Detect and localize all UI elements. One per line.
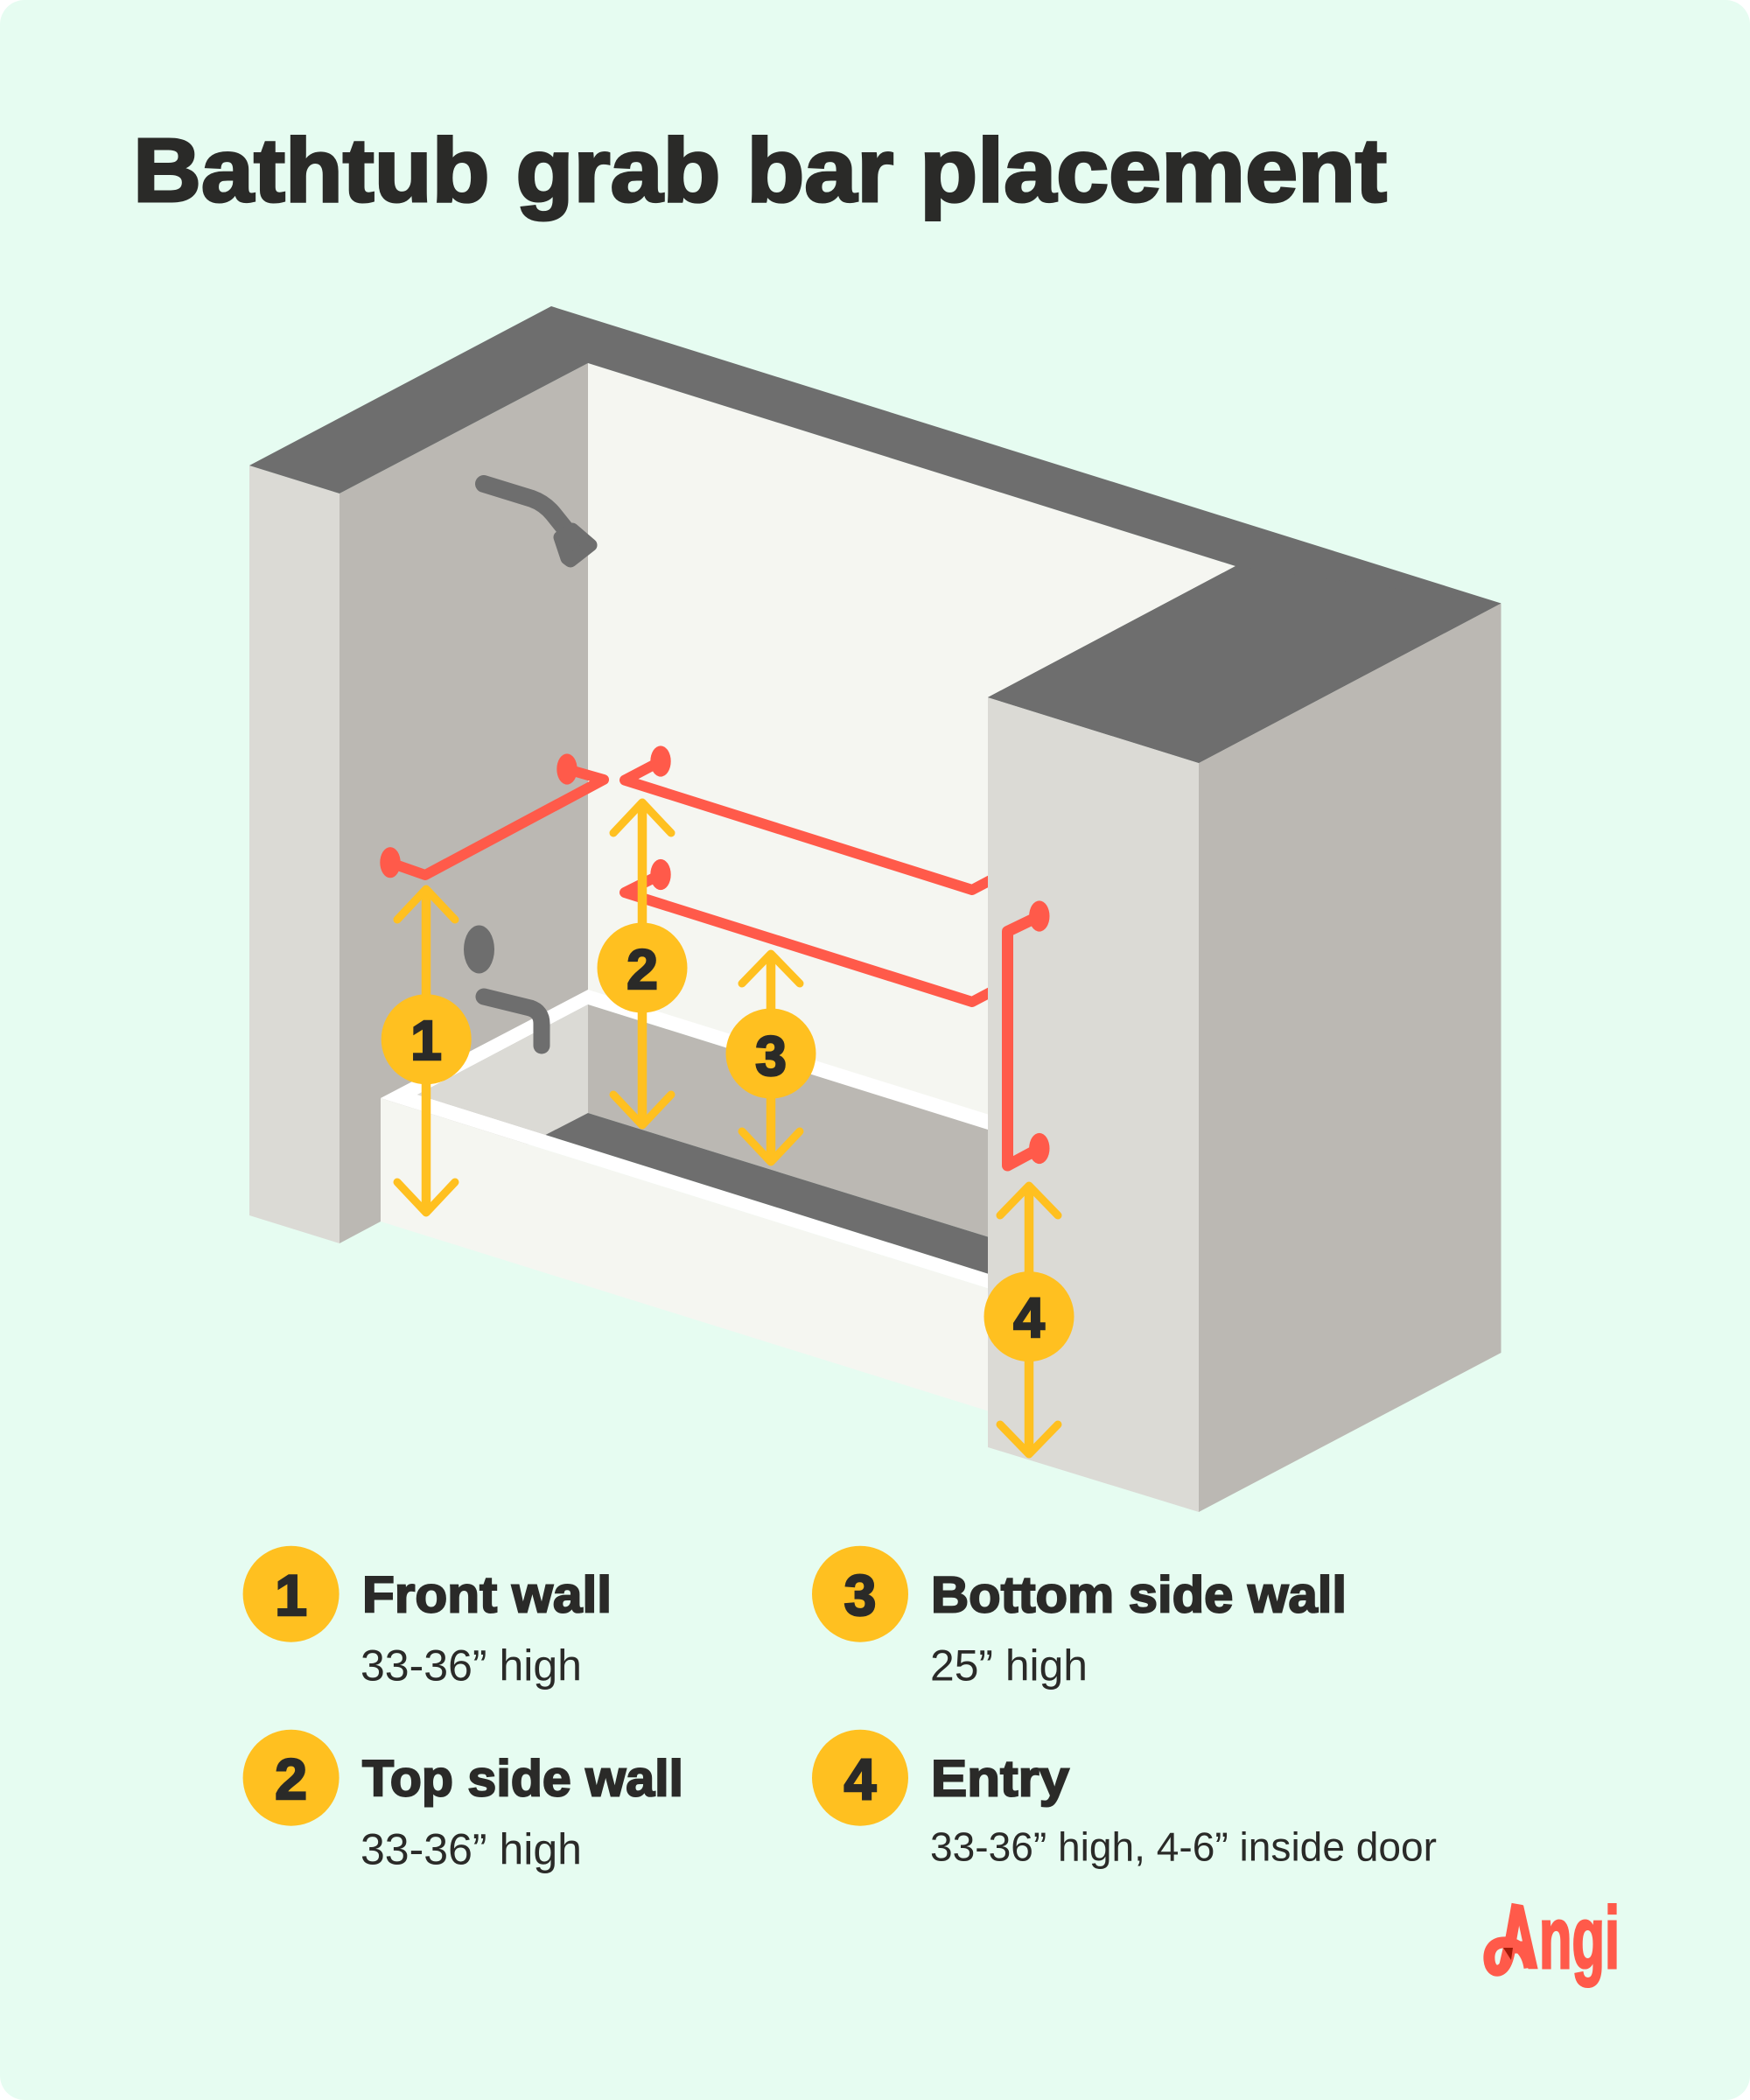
legend item 3: bottom side wall: 25” high [930, 1642, 1088, 1690]
arrow and marker 3: 3 [755, 1025, 787, 1088]
legend item 2: top side wall: 2 [275, 1746, 307, 1811]
tub floor [546, 1113, 988, 1274]
logo: Angi: A [1498, 1889, 1538, 1987]
grab bar: bottom side wall [625, 859, 1002, 1002]
right wall front face [988, 697, 1199, 1512]
arrow and marker 1 [382, 889, 472, 1213]
top of walls [249, 306, 1502, 763]
tub front apron [381, 1098, 988, 1410]
right wall top [988, 566, 1502, 763]
legend item 3: bottom side wall: 3 [844, 1563, 876, 1628]
left inner wall [340, 363, 588, 1243]
grab bar: front wall [380, 753, 604, 878]
right wall side face [1199, 604, 1502, 1512]
legend item 4: entry [812, 1730, 1437, 1869]
legend item 1: front wall [243, 1546, 612, 1690]
left wall end face [249, 466, 340, 1243]
arrow and marker 2: 2 [626, 938, 658, 1001]
legend item 4: entry: 4 [844, 1746, 877, 1811]
legend item 4: entry: Entry [931, 1751, 1069, 1808]
title: Bathtub grab bar placement [133, 120, 1387, 220]
back wall [588, 363, 1236, 1138]
logo: Angi [1489, 1889, 1620, 1987]
tub inner end face [417, 1004, 588, 1135]
arrow and marker 4: 4 [1013, 1286, 1045, 1349]
legend item 2: top side wall [243, 1730, 683, 1874]
legend item 4: entry: 33-36” high, 4-6” inside door [930, 1824, 1437, 1869]
legend item 1: front wall: Front wall [362, 1567, 612, 1624]
legend item 3: bottom side wall [812, 1546, 1347, 1690]
logo: Angi: ngi [1539, 1889, 1620, 1987]
arrow and marker 4 [984, 1186, 1074, 1454]
shower arm [484, 484, 567, 531]
tub spout [484, 997, 542, 1046]
tap knob [464, 926, 494, 973]
tub inner side face [588, 1004, 988, 1237]
legend item 2: top side wall: Top side wall [362, 1751, 683, 1808]
arrow and marker 1: 1 [410, 1009, 442, 1072]
legend item 1: front wall: 1 [275, 1563, 307, 1628]
grab bar: entry [1008, 900, 1050, 1166]
tub back rim [381, 990, 988, 1288]
shower head [560, 529, 591, 561]
legend item 2: top side wall: 33-36” high [360, 1825, 582, 1874]
grab bar: top side wall [625, 746, 1002, 890]
legend item 1: front wall: 33-36” high [360, 1642, 582, 1690]
illustration: bathtub enclosure [249, 306, 1502, 1512]
legend item 3: bottom side wall: Bottom side wall [931, 1567, 1347, 1624]
arrow and marker 3 [726, 954, 816, 1162]
arrow and marker 2 [597, 802, 688, 1125]
